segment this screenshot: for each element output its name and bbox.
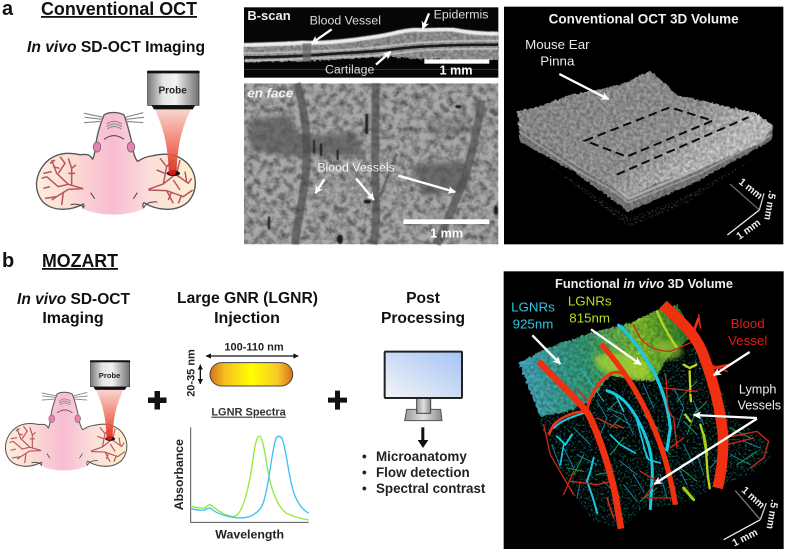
scale bar: 1 mm: 1 mm [439, 63, 473, 77]
text: LGNRs 925nm label: LGNRs [511, 300, 555, 315]
arrow: vessel left [315, 179, 324, 193]
illustration: mouse with probe: Probe [99, 371, 120, 380]
text: panel title: Conventional OCT 3D Volume [549, 11, 739, 26]
scale bar: 1 mm [403, 219, 489, 240]
diagram: gold nanorod [185, 342, 298, 397]
text: Mouse Ear Pinna label: Pinna [540, 54, 575, 69]
line chart: absorbance spectra: Absorbance [172, 439, 186, 510]
illustration: mouse with probe [37, 71, 200, 215]
scale axes: 1 mm [724, 485, 780, 549]
arrow: to cartilage [376, 52, 391, 65]
arrow: to lymph vessel upper [694, 415, 757, 418]
scale axes: 1 mm: .5 mm [761, 189, 777, 221]
arrow: to epidermis [423, 13, 429, 29]
text: B-scan label: B-scan [247, 8, 291, 23]
scale axes: 1 mm [727, 177, 777, 242]
arrow: to 815nm vessels [591, 329, 641, 365]
text: Cartilage label: Cartilage [325, 62, 374, 76]
heading: post processing [381, 290, 465, 327]
chart: 3D tissue volume [517, 71, 773, 227]
heading: large GNR injection: Injection [214, 310, 280, 327]
text: Epidermis label: Epidermis [434, 7, 488, 21]
title: MOZART: MOZART [42, 251, 118, 271]
heading: in vivo SD-OCT imaging: Imaging [42, 310, 104, 327]
illustration: mouse with probe: Probe [159, 86, 187, 97]
list: processing outputs: Flow detection [376, 465, 470, 480]
label: panel b: b [2, 250, 14, 272]
arrow: to 925nm vessels [532, 335, 560, 364]
scale axes: 1 mm: 1 mm [735, 218, 763, 242]
text: Blood Vessel label: Vessel [728, 333, 767, 348]
heading: post processing: Processing [381, 310, 465, 327]
arrow: vessel right [398, 176, 455, 192]
text: LGNR Spectra: LGNR Spectra [211, 407, 287, 419]
text: Blood Vessels label: Blood Vessels [317, 160, 395, 174]
text: Mouse Ear Pinna label [525, 37, 590, 69]
panel: conventional OCT 3D volume [504, 7, 783, 244]
line chart: absorbance spectra [172, 427, 309, 542]
panel: en face [244, 83, 498, 244]
diagram: gold nanorod: 100-110 nm [224, 342, 284, 354]
heading: large GNR injection: Large GNR (LGNR) [177, 290, 318, 307]
text: LGNRs 815nm label: LGNRs [568, 294, 612, 309]
text: panel title: Functional in vivo 3D Volume [555, 276, 733, 291]
scale bar: 1 mm: 1 mm [430, 226, 463, 240]
list: processing outputs: • [362, 449, 367, 464]
arrow: to pinna [559, 74, 609, 99]
text: LGNRs 925nm label: 925nm [513, 317, 553, 332]
list: processing outputs: Spectral contrast [376, 481, 486, 496]
arrow: vessel center [356, 178, 374, 200]
text: Lymph Vessels label: Vessels [738, 398, 781, 412]
icon: plus [148, 391, 166, 410]
text: Blood Vessel label [728, 316, 767, 348]
chart: lymphatic and blood vessel network [519, 305, 772, 529]
illustration: mouse with probe [5, 360, 130, 470]
text: Lymph Vessels label: Lymph [739, 382, 776, 396]
panel: functional in vivo 3D volume [504, 271, 784, 549]
text: Lymph Vessels label [738, 382, 781, 412]
heading: in vivo SD-OCT imaging: In vivo SD-OCT Imaging [27, 39, 205, 56]
text: Blood Vessel label: Blood [731, 316, 765, 331]
text: en face label: en face [247, 85, 294, 100]
diagram: gold nanorod and spectra [172, 342, 347, 542]
scale axes: 1 mm: 1 mm [739, 485, 766, 511]
panel: B-scan [244, 7, 498, 78]
scale bar: 1 mm [424, 59, 489, 77]
arrow: down from monitor [418, 427, 428, 448]
list: processing outputs: • [362, 481, 367, 496]
heading: in vivo SD-OCT imaging [17, 291, 130, 327]
text: LGNRs 815nm label [568, 294, 612, 326]
arrow: to lymph vessel lower [654, 419, 757, 484]
arrow: to blood vessel [312, 29, 332, 43]
heading: large GNR injection [177, 290, 318, 327]
list: processing outputs: Microanatomy [376, 449, 467, 464]
text: Blood Vessel label: Blood Vessel [310, 13, 381, 27]
text: LGNRs 925nm label [511, 300, 555, 332]
scale axes: 1 mm: .5 mm [764, 498, 780, 530]
diagram: gold nanorod: 20-35 nm [185, 349, 197, 397]
icon: computer monitor [385, 352, 462, 421]
text: LGNRs 815nm label: 815nm [569, 311, 610, 326]
heading: in vivo SD-OCT imaging: In vivo SD-OCT [17, 291, 130, 308]
list: processing outputs: • [362, 465, 367, 480]
scale axes: 1 mm: 1 mm [736, 177, 764, 202]
heading: post processing: Post [406, 290, 440, 307]
scale axes: 1 mm: 1 mm [731, 527, 760, 549]
list: processing outputs [362, 449, 486, 496]
icon: plus [328, 391, 347, 410]
line chart: absorbance spectra: Wavelength [215, 528, 284, 542]
dashed region outline [585, 107, 748, 175]
arrow: to blood vessel [714, 352, 750, 375]
text: Mouse Ear Pinna label: Mouse Ear [525, 37, 590, 52]
